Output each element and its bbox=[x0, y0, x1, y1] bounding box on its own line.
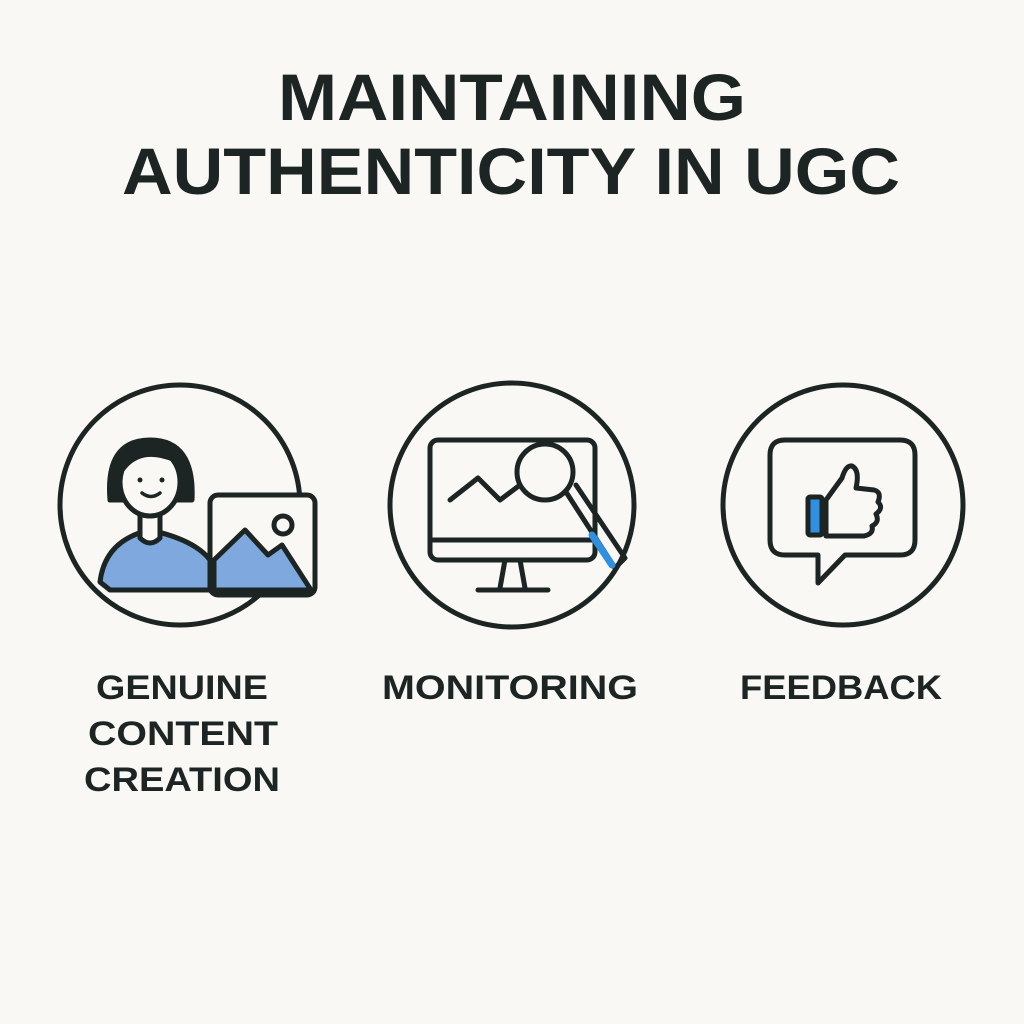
label bbox=[84, 669, 280, 799]
label: MONITORING bbox=[382, 669, 638, 707]
panel: genuine content creation bbox=[60, 385, 315, 799]
panel: monitoring bbox=[382, 383, 638, 707]
icon: speech bubble with thumbs up bbox=[723, 385, 963, 625]
icon: person with picture bbox=[60, 385, 315, 625]
title bbox=[122, 60, 900, 208]
icon: monitor with magnifier bbox=[390, 383, 634, 627]
title: MAINTAINING bbox=[278, 60, 746, 134]
label: GENUINE bbox=[96, 669, 268, 707]
label: CONTENT bbox=[88, 715, 278, 753]
panel: feedback bbox=[723, 385, 963, 707]
label: FEEDBACK bbox=[740, 669, 942, 707]
label: CREATION bbox=[84, 761, 280, 799]
title: AUTHENTICITY IN UGC bbox=[122, 134, 900, 208]
